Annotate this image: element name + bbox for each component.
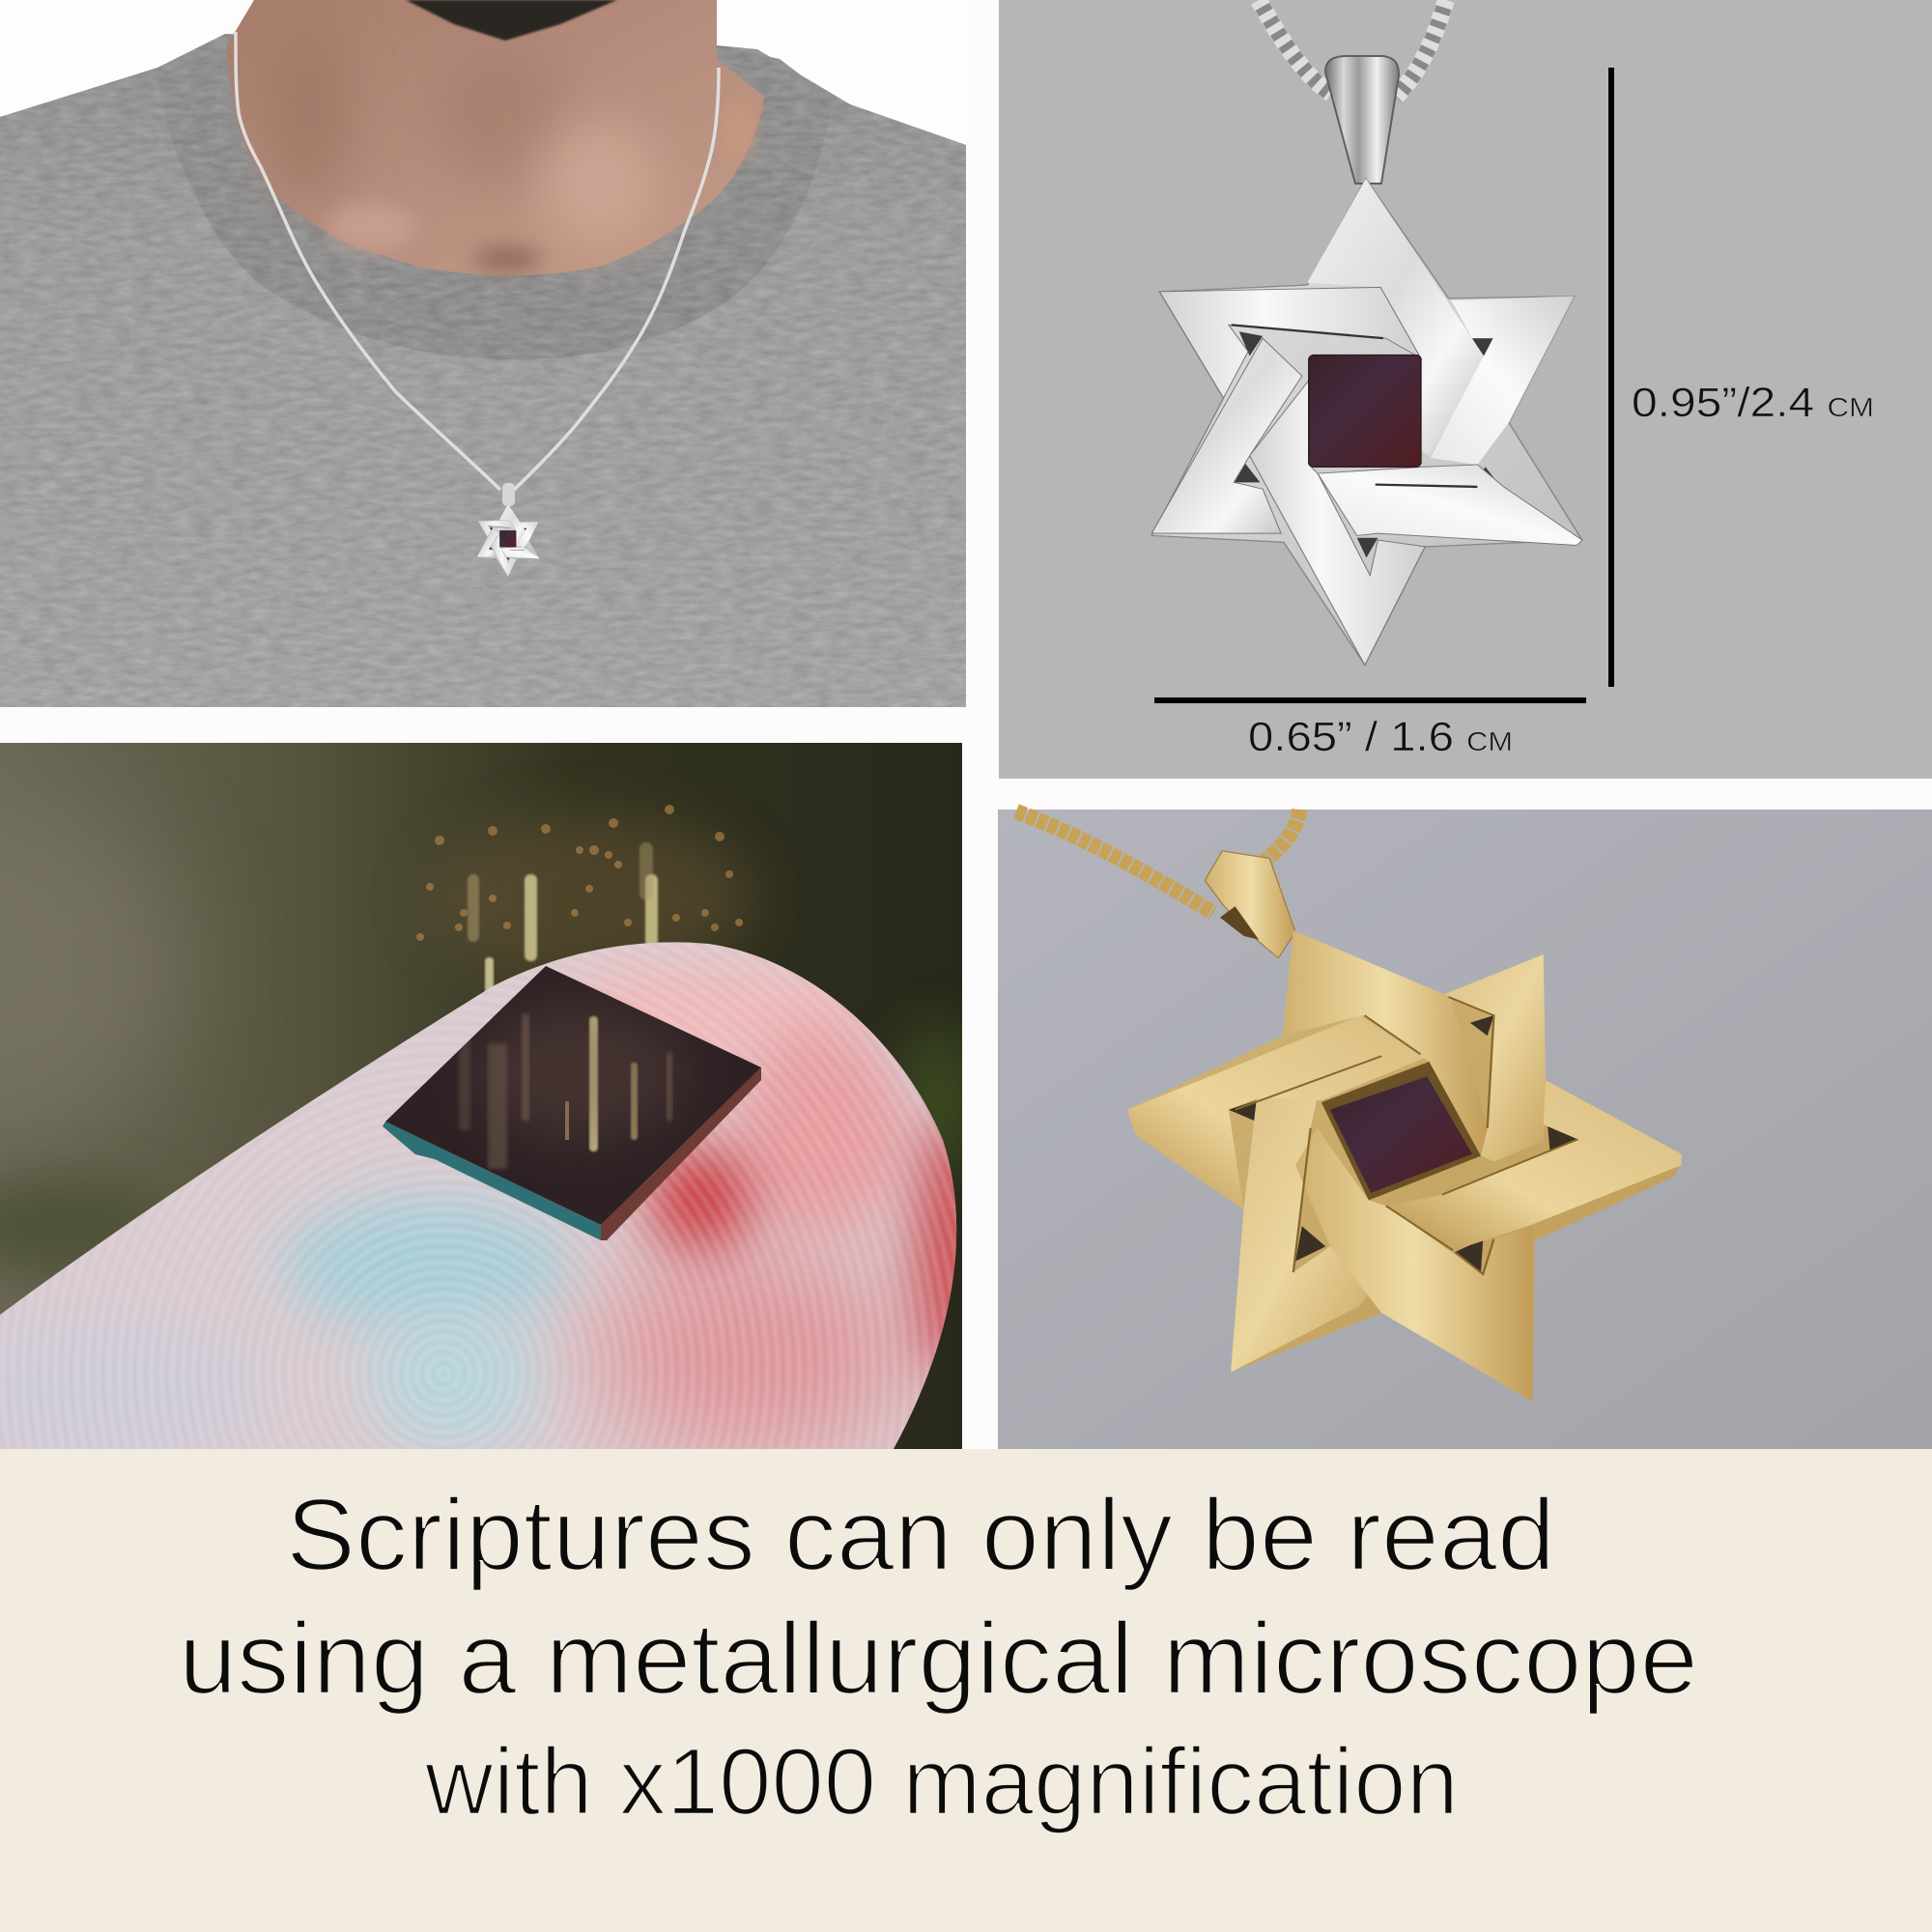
width label: 0.65” / 1.6 CM: [1248, 714, 1513, 760]
panel: silver pendant with dimensions: [999, 0, 1932, 779]
chip: [385, 966, 761, 1225]
chip light streaks: [459, 1005, 686, 1169]
small pendant: [477, 504, 540, 577]
gold stone: [1321, 1062, 1481, 1201]
chip side edges: [383, 1122, 601, 1240]
panel: chip on fingertip: [0, 743, 985, 1459]
caption panel: [0, 1449, 1932, 1932]
panel: man wearing necklace: [0, 0, 966, 707]
background haze: [0, 833, 188, 1099]
shirt texture: [0, 0, 966, 707]
chain: [236, 32, 719, 490]
beard: [406, 0, 617, 41]
fingertip: [0, 927, 985, 1459]
shirt collar: [157, 36, 833, 359]
width dimension line: [1154, 697, 1586, 703]
gold star: [1127, 851, 1682, 1402]
gold chain: [1016, 810, 1299, 913]
height dimension line: [1608, 68, 1614, 687]
silver bail: [1325, 56, 1399, 184]
small pendant bail: [502, 483, 515, 506]
panel: gold pendant: [998, 810, 1932, 1449]
caption line 2: using a metallurgical microscope: [179, 1602, 1698, 1716]
height label: 0.95”/2.4 CM: [1632, 380, 1874, 426]
silver chain: [1259, 0, 1446, 97]
shirt: [0, 34, 966, 707]
gold star silhouette: [1127, 930, 1682, 1402]
fingerprint ridges: [0, 927, 962, 1449]
silver star: [1151, 179, 1582, 665]
caption line 3: with x1000 magnification: [424, 1728, 1459, 1834]
gold slits: [1236, 997, 1577, 1274]
gold bail: [1205, 851, 1295, 958]
neck skin: [227, 0, 764, 275]
golden bokeh lights: [416, 805, 753, 1006]
caption line 1: Scriptures can only be read: [286, 1478, 1555, 1592]
